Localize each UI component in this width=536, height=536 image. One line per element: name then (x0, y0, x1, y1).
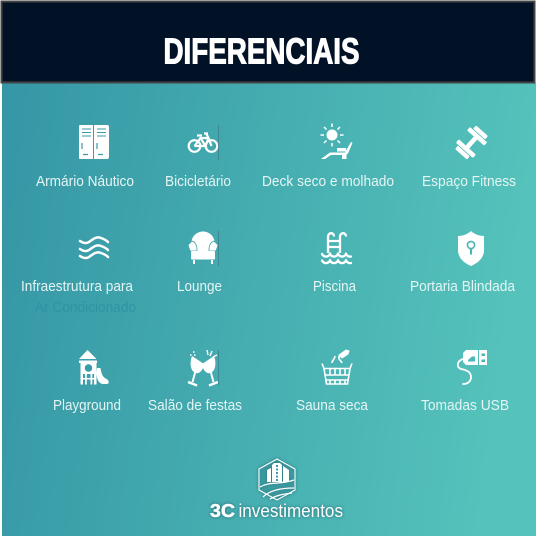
icon: sauna bucket (322, 350, 352, 384)
icon: lockers (79, 125, 109, 159)
amenity: Deck seco e molhado (262, 124, 394, 190)
amenity: Tomadas USB (421, 350, 509, 414)
amenity: Playground (53, 350, 121, 414)
icon: sun and lounger (320, 124, 352, 159)
amenity: Espaço Fitness: Espaço Fitness (422, 174, 516, 190)
label: Infraestrutura para (21, 279, 134, 295)
amenity: Lounge (177, 231, 222, 295)
amenity: Infraestrutura para Ar Condicionado (21, 237, 136, 316)
icon: champagne toast (188, 350, 218, 386)
icon: USB plug (458, 350, 487, 384)
icon: pool ladder (322, 233, 351, 263)
amenity: Espaço Fitness (422, 123, 516, 190)
amenity: Portaria Blindada: Portaria Blindada (410, 279, 516, 295)
amenity: Deck seco e molhado: Deck seco e molhado (262, 174, 394, 190)
label: Ar Condicionado (35, 300, 136, 316)
title: DIFERENCIAIS (164, 30, 360, 72)
wordmark: 3C (210, 501, 235, 521)
icon: air waves (80, 237, 108, 258)
amenity: Sauna seca: Sauna seca (296, 398, 369, 414)
amenity: Piscina (313, 233, 357, 295)
icon: armchair (188, 231, 218, 266)
icon: slide tower (79, 350, 109, 384)
icon: bicycle (189, 125, 218, 160)
amenity: Salão de festas: Salão de festas (148, 398, 242, 414)
amenity: Playground: Playground (53, 398, 121, 414)
amenity: Lounge: Lounge (177, 279, 222, 295)
amenity: Bicicletário (165, 125, 231, 190)
logo: 3C investimentos (210, 459, 343, 521)
amenity: Salão de festas (148, 350, 242, 414)
amenity: Bicicletário: Bicicletário (165, 174, 231, 190)
label (21, 279, 136, 316)
icon: shield with keyhole (458, 231, 484, 266)
amenity: Tomadas USB: Tomadas USB (421, 398, 509, 414)
icon: dumbbell (452, 123, 491, 162)
amenity: Sauna seca (296, 350, 369, 414)
amenity: Armário Náutico: Armário Náutico (36, 174, 134, 190)
icon: hexagon logo (259, 459, 295, 500)
header banner (2, 2, 534, 82)
wordmark: investimentos (238, 501, 343, 521)
amenity: Portaria Blindada (410, 231, 516, 295)
amenity: Piscina: Piscina (313, 279, 357, 295)
amenity: Armário Náutico (36, 125, 134, 190)
